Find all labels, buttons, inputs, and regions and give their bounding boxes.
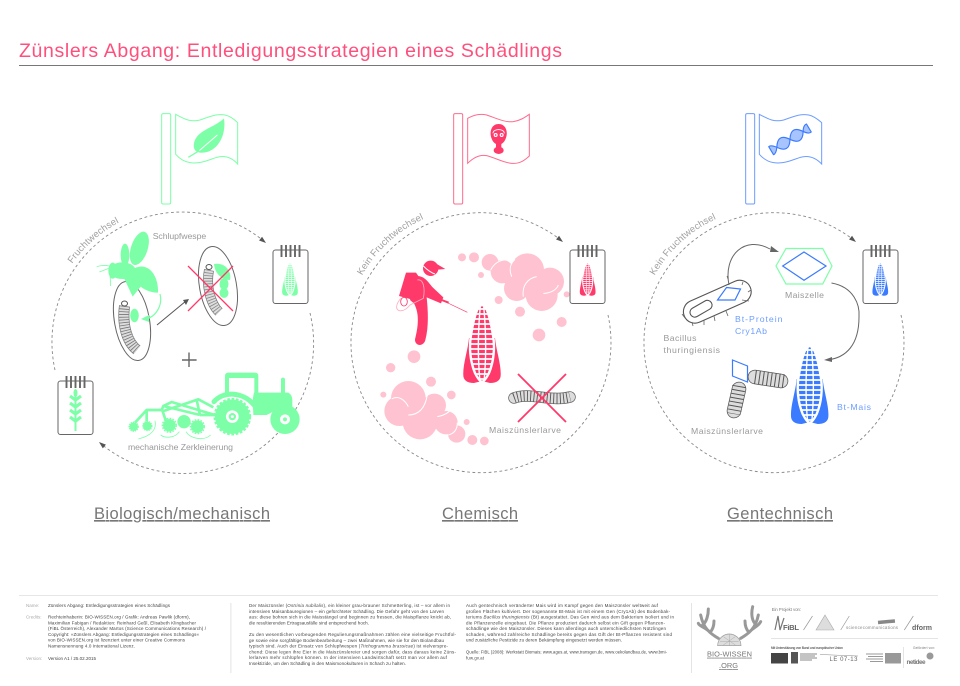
arrow: cell to Bt maize	[824, 283, 859, 362]
credits block: Rechteinhaberin: BIO-WISSEN.org / Grafik: Andreas Pawlik (dform),	[48, 614, 190, 620]
credits block: Credits:	[26, 614, 42, 620]
body text column 2: Quelle: FiBL (2008): Werkstatt Biomais; www.ages.at, www.transgen.de, www.oekolandbau.de, www.bmi-	[466, 650, 668, 655]
partner logos: Gefördert von:	[913, 646, 935, 650]
label: Bt-Protein Cry1Ab: Bt-Protein	[735, 314, 783, 324]
flag: gas mask	[454, 114, 529, 204]
notebook: corn	[570, 245, 605, 304]
body text column 2: schaden, während zahlreiche Schädlinge bereits gegen das Gift der Bt-Pflanzen resistent sind	[466, 632, 672, 637]
credits block: Namensnennung 4.0 International Lizenz.	[48, 644, 135, 648]
label: Maiszünslerlarve: Maiszünslerlarve	[489, 425, 561, 435]
footer	[19, 595, 938, 673]
label: Bt-Protein Cry1Ab: Cry1Ab	[735, 326, 767, 336]
arrow between eggs	[157, 299, 189, 325]
label: Fruchtwechsel: Fruchtwechsel	[67, 216, 118, 263]
body text column 2: die Pflanzenzelle eingebaut. Die Pflanze produziert dadurch selbst ein Gift gegen Pflanzen-	[466, 620, 666, 625]
credits block: Zünslers Abgang: Entledigungsstrategien eines Schädlings	[48, 603, 171, 608]
body text column 1: Zu den wesentlichen vorbeugenden Regulierungsmaßnahmen zählen eine vielseitige Fruchtfol-	[249, 632, 456, 637]
Bt corn	[790, 346, 830, 424]
body text column 1: lerlarven mehr schlüpfen können. In der intensiven Landwirtschaft setzt man vor allem auf	[249, 655, 448, 660]
body text column 2	[466, 603, 674, 660]
credits block	[26, 603, 207, 661]
larvae eating Bt-protein	[732, 360, 784, 414]
partner logos: netidee	[906, 659, 926, 666]
title: Zünslers Abgang: Entledigungsstrategien eines Schädlings	[19, 40, 562, 62]
label: Kein Fruchtwechsel: Kein Fruchtwechsel	[649, 213, 716, 275]
body text column 2: und zusätzliche Pestizide zu deren Bekämpfung eingesetzt werden müssen.	[466, 638, 622, 642]
body text column 2: fuw.gv.at	[466, 656, 485, 660]
partner logos: FiBL	[783, 623, 799, 632]
heading: Chemisch: Chemisch	[442, 505, 518, 523]
title rule	[19, 65, 933, 66]
body text column 2: Auch gentechnisch veränderter Mais wird im Kampf gegen den Maiszünsler weltweit auf	[466, 603, 659, 608]
credits block: Name:	[26, 603, 39, 608]
body text column 1: chend: Diese legen ihre Eier in die Maiszünslereier und sorgen dafür, dass daraus keine Züns-	[249, 649, 456, 654]
partner logos: LE 07-13	[830, 657, 858, 663]
body text column 1: Der Maiszünsler (Ostrinia nubilalis), ein kleiner grau-brauner Schmetterling, ist – vor allem in	[249, 603, 450, 608]
arrow: gene to maize cell	[728, 244, 779, 285]
label: Bacillus thuringiensis: thuringiensis	[664, 345, 721, 355]
bacillus	[680, 276, 755, 327]
flag: leaf	[162, 114, 238, 204]
credits block: Maximilian Fabigan / Redaktion: Reinhard Geßl, Elisabeth Klingbacher	[48, 620, 196, 625]
corn, pink	[462, 305, 502, 383]
credits block: Version:	[26, 656, 42, 661]
logo: BIO-WISSEN.ORG: .ORG	[719, 661, 738, 670]
credits block: Version A1 / 25.02.2015	[48, 656, 96, 661]
crossed out larva in egg	[188, 243, 243, 329]
partner logos	[771, 607, 938, 668]
label: Kein Fruchtwechsel: Kein Fruchtwechsel	[356, 213, 423, 275]
crop rotation cycle arrows	[52, 212, 314, 473]
cycle arrow	[351, 213, 611, 473]
cycle arrow	[644, 213, 904, 473]
panel: gentechnisch	[644, 113, 904, 523]
flag: DNA	[746, 114, 822, 204]
label: Maiszünslerlarve: Maiszünslerlarve	[691, 426, 763, 436]
label: Schlupfwespe: Schlupfwespe	[153, 231, 206, 241]
wasp	[97, 229, 158, 297]
plus sign	[182, 352, 197, 367]
body text column 2: großen Flächen kultiviert. Der sogenannte Bt-Mais ist mit einem Gen (Cry1Ab) des Bodenbak-	[466, 609, 670, 614]
label: Bacillus thuringiensis	[664, 333, 721, 355]
label: Bacillus thuringiensis: Bacillus	[664, 333, 697, 343]
body text column 1: ge sowie eine sorgfältige Bodenbearbeitung – zwei Maßnahmen, wie sie für den Biolandbau	[249, 638, 444, 643]
body text column 1	[249, 603, 456, 666]
logo: BIO-WISSEN.ORG	[698, 607, 761, 670]
host egg with larva and parasitic egg	[108, 279, 161, 363]
label: Maiszelle: Maiszelle	[785, 290, 824, 300]
label: Bt-Mais: Bt-Mais	[837, 402, 872, 412]
crossed out maize borer larva	[514, 374, 570, 422]
label: mechanische Zerkleinerung: mechanische Zerkleinerung	[128, 442, 233, 452]
body text column 1: die resultierenden Ertragsausfälle sind entsprechend hoch.	[249, 620, 369, 625]
partner logos: dform	[912, 625, 932, 632]
panel: chemisch	[350, 113, 612, 523]
partner logos: Mit Unterstützung von Bund und europäischer Union	[771, 646, 843, 650]
body text column 1: aus: diese bohren sich in die Maisstängel und beginnen zu fressen, die Maispflanze knickt ab,	[249, 614, 451, 620]
pesticide clouds	[380, 252, 570, 445]
heading: Biologisch/mechanisch: Biologisch/mechanisch	[94, 505, 270, 523]
body text column 2: teriums Bacillus thuringiensis (Bt) ausgestattet. Das Gen wird aus dem Bakterium isoliert und in	[466, 615, 674, 620]
body text column 2: schädlinge wie den Maiszünsler. Dieses kann allerdings auch unterschiedlichsten Nützlingen	[466, 626, 666, 631]
heading: Gentechnisch: Gentechnisch	[727, 505, 833, 523]
credits block: Copyright: »Zünslers Abgang: Entledigungsstrategien eines Schädlings«	[48, 632, 199, 637]
logo: BIO-WISSEN.ORG: BIO-WISSEN	[707, 650, 752, 659]
body text column 1: typisch sind. Auch der Einsatz von Schlupfwespen (Trichogramma brassicae) ist vielverspre-	[249, 644, 448, 649]
notebook: corn	[863, 245, 898, 304]
credits block: von BIO-WISSEN.org ist lizenziert unter einer Creative Commons	[48, 638, 186, 643]
tractor with cultivator	[129, 373, 300, 439]
notebook: wheat	[58, 376, 93, 434]
partner logos: sciencecommunications	[846, 625, 899, 630]
maize cell	[776, 248, 832, 284]
panel: biologisch/mechanisch	[52, 113, 314, 523]
label: Bt-Protein Cry1Ab	[735, 314, 783, 336]
body text column 1: Insektizide, um den Schädling in den Maismonokulturen in Schach zu halten.	[249, 661, 406, 666]
body text column 1: intensiven Maisanbauregionen – ein gefürchteter Schädling. Die Gefahr geht von den Larven	[249, 609, 444, 614]
notebook: corn	[273, 245, 308, 304]
partner logos: Ein Projekt von:	[772, 607, 801, 612]
credits block: (FiBL Österreich), Alexander Martos (Science Communications Research) /	[48, 625, 207, 631]
sprayer person	[397, 261, 467, 345]
